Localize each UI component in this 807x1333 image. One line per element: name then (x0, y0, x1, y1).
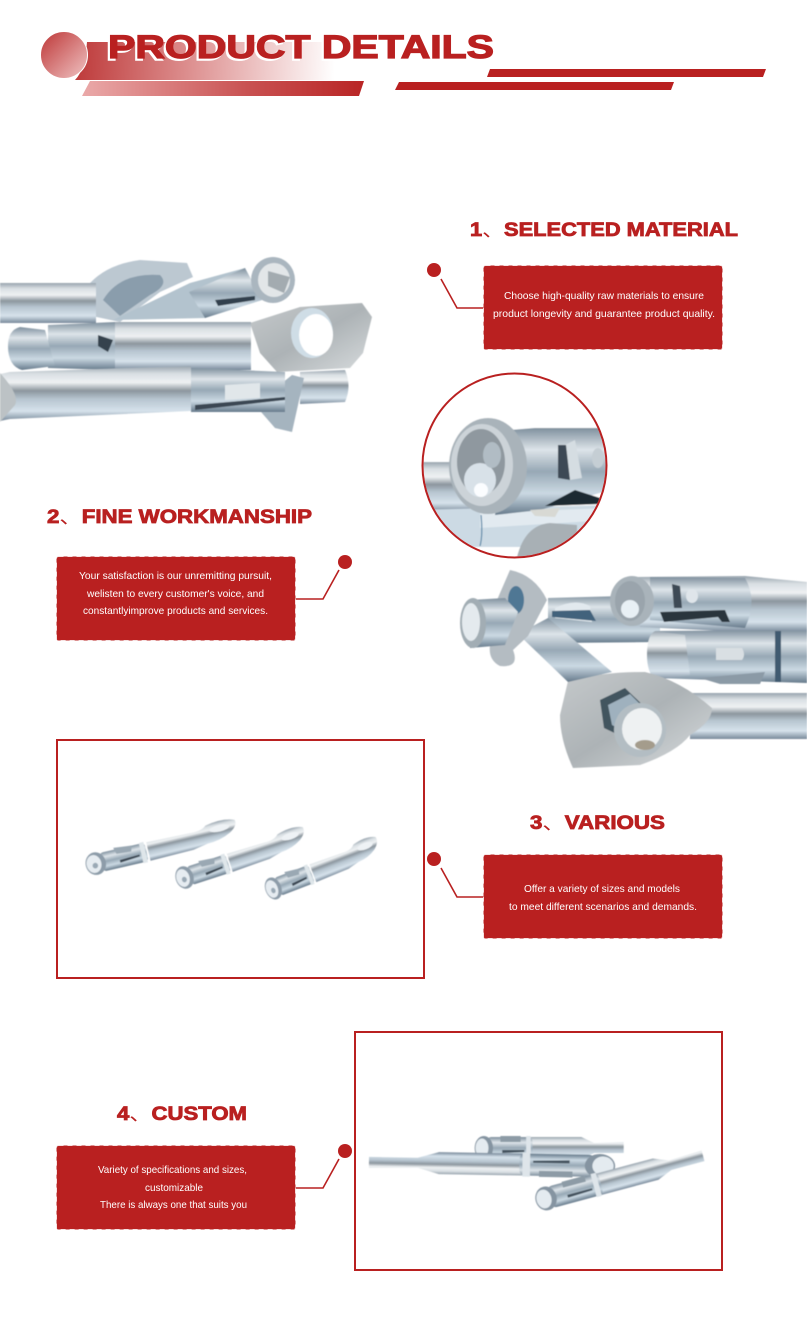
box text: constantlyimprove products and services. (83, 605, 268, 617)
diagonal rod (518, 618, 612, 682)
box text: There is always one that suits you (100, 1199, 247, 1211)
middle bolt with eye plate (8, 303, 372, 372)
callout 1 (427, 263, 722, 350)
header lower band (82, 81, 364, 96)
callout dot and connector (296, 555, 352, 599)
header gradient band (75, 42, 335, 80)
box text: welisten to every customer's voice, and (86, 588, 264, 600)
text box (484, 266, 722, 350)
box text: Choose high-quality raw materials to ensure (504, 290, 704, 302)
photo: bolts large right (460, 570, 807, 768)
upper back bolt with head (610, 576, 807, 632)
title: PRODUCT DETAILS (106, 31, 492, 67)
callout 3 (427, 852, 722, 938)
box text: customizable (145, 1182, 203, 1194)
big front rod (690, 693, 807, 739)
photo: bolts close-up top left (0, 257, 372, 432)
image frame: three bolts (57, 740, 424, 978)
box text (493, 290, 715, 320)
lower back bolt (548, 595, 660, 643)
bolts group (83, 817, 384, 902)
text box (484, 854, 722, 938)
bottom bolt (0, 366, 348, 432)
callout dot and connector (427, 263, 484, 308)
box text: Offer a variety of sizes and models (524, 883, 680, 895)
box text: to meet different scenarios and demands. (509, 901, 697, 913)
header ball (40, 32, 88, 78)
box text (79, 570, 272, 617)
lens ring (422, 374, 606, 558)
text box (56, 1146, 296, 1230)
heading: fine workmanship: 2、FINE WORKMANSHIP (47, 507, 312, 528)
left plate and head (460, 570, 547, 666)
header banner (40, 29, 766, 96)
box text: Variety of specifications and sizes, (98, 1164, 247, 1176)
top rod with eye (0, 260, 193, 323)
text box (56, 556, 296, 640)
box text: Your satisfaction is our unremitting pursuit, (79, 570, 272, 582)
image frame: custom bolts (355, 1032, 722, 1270)
header bar upper (487, 69, 766, 77)
heading: selected material: 1、SELECTED MATERIAL (470, 220, 738, 241)
heading: various: 3、VARIOUS (530, 813, 665, 834)
callout dot and connector (296, 1144, 352, 1188)
title: PRODUCT DETAILS (108, 29, 494, 65)
zoom lens inset (420, 370, 610, 560)
middle right bolt (647, 630, 807, 684)
lens contents (424, 418, 606, 556)
callout 4 (56, 1144, 352, 1230)
callout 2 (56, 555, 352, 640)
header bar lower (395, 82, 674, 90)
box text (509, 883, 697, 913)
front plate with nose (560, 672, 712, 768)
callout dot and connector (427, 852, 484, 897)
box text: product longevity and guarantee product quality. (493, 308, 715, 320)
heading: custom: 4、CUSTOM (117, 1104, 247, 1125)
box text (98, 1164, 247, 1211)
bolts group (369, 1136, 706, 1213)
diagonal bolt behind (113, 257, 295, 320)
